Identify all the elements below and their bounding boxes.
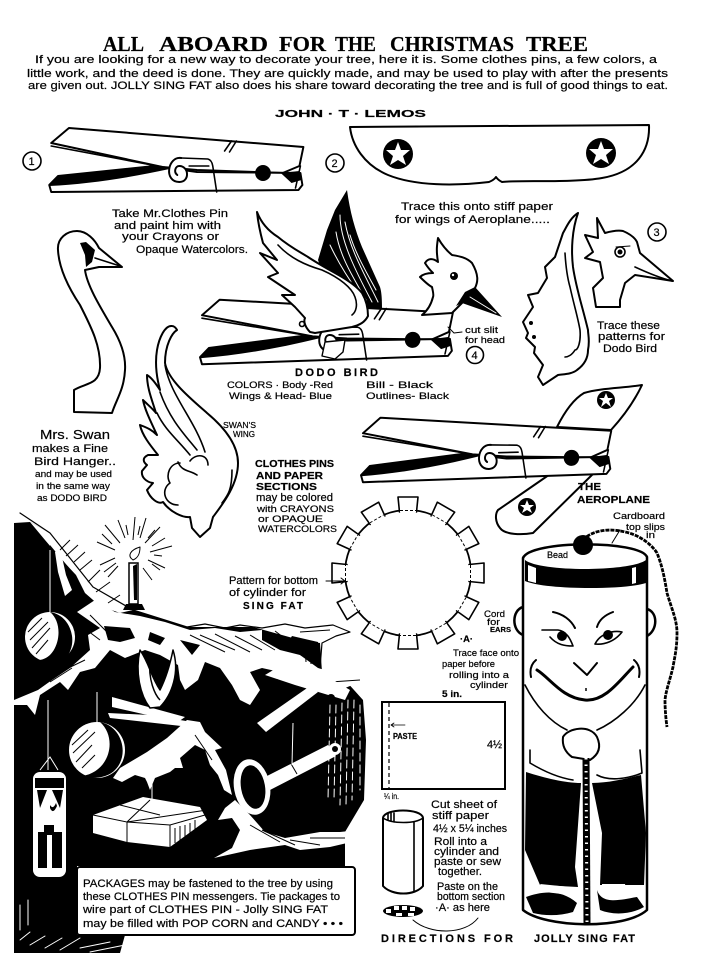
caption: cut and roll directions: stiff paper <box>432 810 489 822</box>
aeroplane assembled <box>361 385 642 534</box>
step 3: dodo head pattern <box>585 218 673 307</box>
caption: cardboard top: in <box>646 530 655 541</box>
right-side hatching <box>328 700 360 805</box>
grass hatching <box>20 900 125 952</box>
tree branches <box>14 513 380 858</box>
cord string <box>583 530 677 727</box>
caption: bead: Bead <box>547 550 568 561</box>
caption: cut and roll directions: bottom section <box>437 891 505 903</box>
swan pattern <box>58 231 125 413</box>
title: THE <box>335 32 376 56</box>
mini Sing Fat ornament <box>33 700 66 877</box>
tied package <box>93 760 207 847</box>
swan's wing pattern <box>140 326 238 537</box>
step 3 number: 3 <box>654 227 660 239</box>
caption: wing tracing: for wings of Aeroplane..... <box>395 214 550 226</box>
caption: clothes pins and paper sections: or OPAQUE <box>258 514 323 525</box>
ears <box>514 607 655 636</box>
caption: cut and roll directions: 4½ x 5¼ inches <box>433 823 507 835</box>
step 1: clothes pin <box>23 128 303 192</box>
caption: Mrs. Swan: and may be used <box>35 469 112 480</box>
caption: cut slit for head: for head <box>465 335 505 346</box>
intro text: are given out. JOLLY SING FAT also does his share toward decorating the tree and is full of good things to eat. <box>28 80 668 92</box>
dodo bird assembled <box>200 190 502 364</box>
caption: clothes pins and paper sections: with CRAYONS <box>256 504 334 515</box>
packages note box <box>77 867 355 935</box>
step 2: aeroplane wing pattern <box>326 125 649 184</box>
caption: cardboard top: Cardboard <box>613 511 665 522</box>
christmas tree scene <box>14 513 380 953</box>
caption: cord for ears <box>484 609 511 634</box>
dodo head <box>420 238 477 315</box>
caption: cut slit for head: cut slit <box>465 325 498 336</box>
caption: Mrs. Swan <box>32 427 116 504</box>
caption: trace these patterns <box>597 320 665 355</box>
shoes <box>526 890 644 915</box>
caption: Mrs. Swan: in the same way <box>36 481 110 492</box>
shoulders and jacket <box>525 685 645 780</box>
caption: cord for ears: EARS <box>490 627 511 634</box>
tree horn <box>229 723 341 818</box>
caption: Mrs. Swan: Mrs. Swan <box>40 427 110 442</box>
trousers <box>525 772 646 887</box>
caption: cut and roll directions: cylinder and <box>434 846 499 858</box>
packages note box: may be filled with POP CORN and CANDY • • • <box>83 918 343 930</box>
cane <box>586 758 587 924</box>
dodo bird label and colours: Bill - Black <box>366 380 433 391</box>
hands <box>563 729 599 760</box>
aeroplane label: AEROPLANE <box>577 495 650 506</box>
title: ABOARD <box>159 32 268 56</box>
caption: Mrs. Swan: makes a Fine <box>32 443 108 455</box>
caption: cut and roll directions: Paste on the <box>437 881 498 893</box>
caption: take clothes pin: and paint him with <box>114 220 221 232</box>
directions heading: JOLLY SING FAT <box>534 933 635 945</box>
title: TREE <box>526 32 588 56</box>
caption: pattern for bottom <box>229 575 345 612</box>
caption: trace face: cylinder <box>470 680 508 691</box>
bead <box>573 535 593 555</box>
title: FOR <box>279 32 327 56</box>
step 4 number: 4 <box>472 350 478 362</box>
ornament lower <box>69 692 125 778</box>
directions heading <box>381 933 635 945</box>
caption: take clothes pin: Take Mr.Clothes Pin <box>112 208 228 220</box>
caption: trace face: paper before <box>442 659 495 670</box>
Jolly Sing Fat figure <box>514 530 677 924</box>
caption: take clothes pin: your Crayons or <box>122 231 219 243</box>
aeroplane label <box>577 482 650 506</box>
paper sheet diagram: PASTE <box>393 732 418 741</box>
packages note box: these CLOTHES PIN messengers. Tie packages to <box>83 891 340 903</box>
caption: swan's wing: WING <box>233 430 255 439</box>
caption: cut and roll directions: Cut sheet of <box>431 799 498 811</box>
step 4 number <box>466 346 484 364</box>
caption: wing tracing <box>395 201 553 226</box>
intro text <box>27 54 669 92</box>
dodo bird label and colours <box>227 367 449 402</box>
step 3: dodo feather pattern <box>523 213 589 385</box>
caption: cut and roll directions: paste or sew <box>434 856 501 868</box>
dodo bird label and colours: DODO BIRD <box>295 367 378 379</box>
caption: cut and roll directions: together. <box>438 866 482 878</box>
intro text: little work, and the deed is done. They are quickly made, and may be used to play with after the presents <box>27 68 669 80</box>
caption: take clothes pin <box>112 208 248 256</box>
ornament upper <box>25 550 75 663</box>
caption: pattern for bottom: Pattern for bottom <box>229 575 318 587</box>
caption: pattern for bottom: SING FAT <box>243 601 303 612</box>
title: ALL <box>103 32 144 56</box>
step 3 number <box>648 223 666 241</box>
dodo bird label and colours: COLORS · Body -Red <box>227 380 333 391</box>
step 1: clothes pin: 1 <box>28 156 35 168</box>
caption: Mrs. Swan: as DODO BIRD <box>37 493 107 504</box>
caption: take clothes pin: Opaque Watercolors. <box>136 244 248 256</box>
caption: cardboard top <box>613 511 665 541</box>
caption: clothes pins and paper sections: WATERCOLORS <box>258 524 337 535</box>
caption: trace face <box>442 648 519 691</box>
dodo wing <box>257 212 368 333</box>
paper sheet diagram: 5 in. <box>442 689 462 700</box>
paper sheet diagram <box>382 689 505 801</box>
small gear base <box>383 905 423 917</box>
caption: clothes pins and paper sections: CLOTHES PINS <box>255 459 334 470</box>
caption: cut and roll directions: ·A· as here <box>435 902 490 914</box>
intro text: If you are looking for a new way to decorate your tree, here it is. Some clothes pins, a few colors, a <box>35 54 658 66</box>
paper sheet diagram: ¼ in. <box>384 792 399 801</box>
hat band <box>525 560 646 588</box>
caption: cord for ears: Cord <box>484 609 505 620</box>
section A label: ·A· <box>460 634 473 644</box>
caption: trace these patterns: patterns for <box>598 331 665 343</box>
face <box>531 612 639 700</box>
caption: cardboard top: top slips <box>626 522 665 533</box>
caption: trace face: rolling into a <box>449 670 510 681</box>
caption: swan's wing <box>223 421 256 439</box>
aeroplane label: THE <box>578 482 601 493</box>
title: CHRISTMAS <box>390 32 514 56</box>
curved arrow to base <box>413 918 478 931</box>
author credit: JOHN · T · LEMOS <box>275 108 426 120</box>
small rolled cylinder <box>383 810 423 894</box>
caption: cut and roll directions <box>431 799 507 914</box>
caption: cut and roll directions: Roll into a <box>434 836 488 848</box>
step 2: aeroplane wing pattern: 2 <box>332 158 338 170</box>
paper sheet diagram: 4½ <box>487 739 502 751</box>
dodo bird label and colours: Wings & Head- Blue <box>229 391 332 402</box>
dodo tail feathers <box>318 190 382 312</box>
tree aeroplane <box>257 660 350 732</box>
caption: clothes pins and paper sections: SECTIONS <box>256 482 317 493</box>
dodo bird label and colours: Outlines- Black <box>366 391 449 402</box>
title <box>103 32 588 56</box>
candle with rays <box>97 517 172 610</box>
caption: clothes pins and paper sections: AND PAPER <box>256 471 324 482</box>
packages note box: PACKAGES may be fastened to the tree by using <box>83 878 333 890</box>
caption: swan's wing: SWAN'S <box>223 421 256 430</box>
caption: wing tracing: Trace this onto stiff paper <box>401 201 553 213</box>
caption: trace face: Trace face onto <box>453 648 519 659</box>
caption: clothes pins and paper sections <box>255 459 337 535</box>
caption: pattern for bottom: of cylinder for <box>229 587 306 599</box>
directions heading: DIRECTIONS FOR <box>381 933 513 945</box>
cylinder body <box>523 544 647 924</box>
caption: cord for ears: for <box>487 617 500 628</box>
packages note box: wire part of CLOTHES PIN - Jolly SING FAT <box>82 904 328 916</box>
caption: trace these patterns: Dodo Bird <box>603 343 657 355</box>
caption: clothes pins and paper sections: may be colored <box>256 492 333 504</box>
caption: trace these patterns: Trace these <box>597 320 660 332</box>
tree clothes pin and dodo wing <box>108 650 192 727</box>
caption: Mrs. Swan: Bird Hanger.. <box>34 456 116 468</box>
gear pattern A for cylinder bottom <box>332 497 484 649</box>
caption: cut slit for head <box>448 325 505 346</box>
